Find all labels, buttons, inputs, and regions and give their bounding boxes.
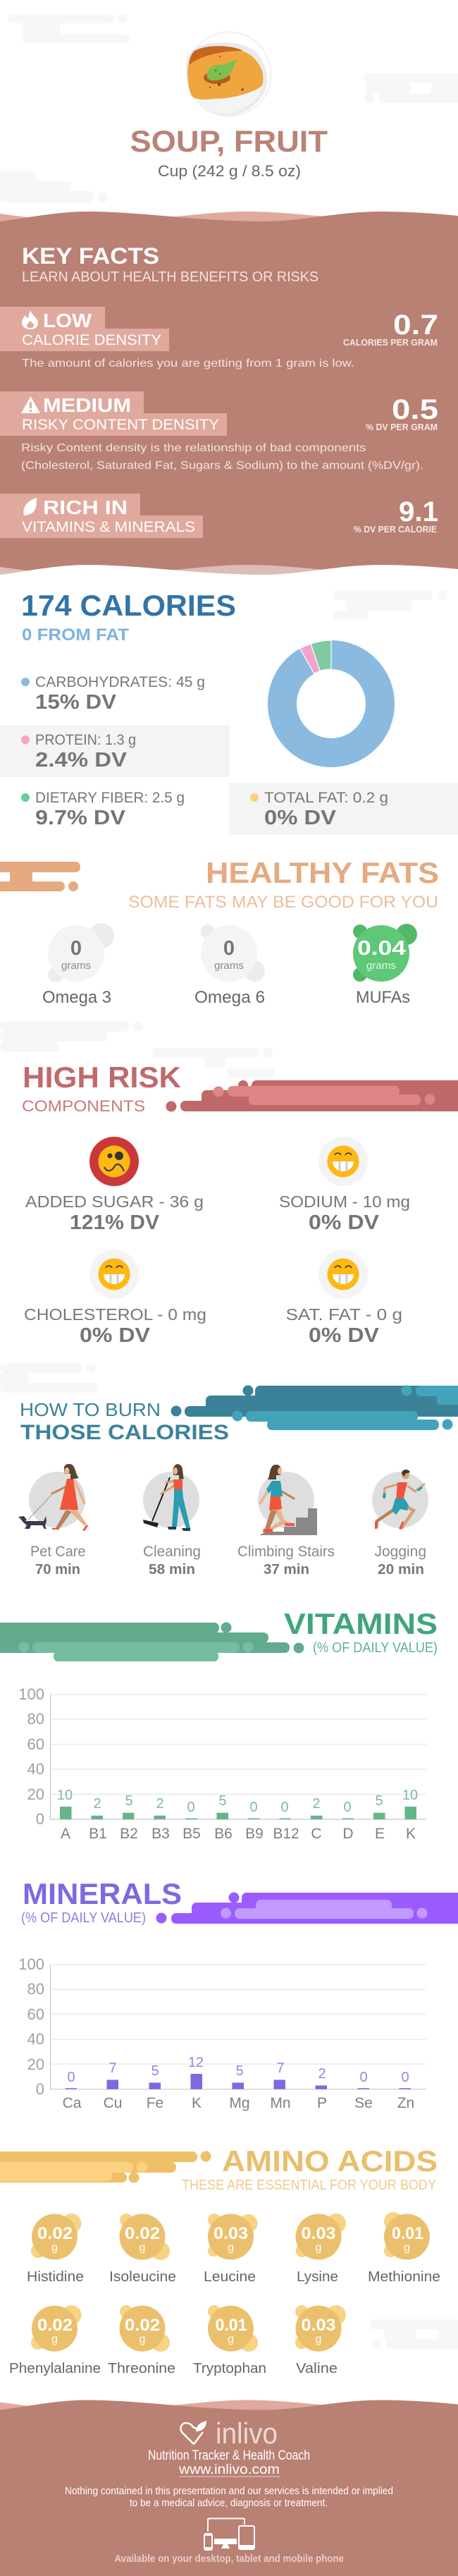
illustration: woman on stairs <box>258 1465 317 1535</box>
icon: grin face <box>318 1137 368 1186</box>
unit: % dv per calorie: % DV PER CALORIE <box>354 525 437 535</box>
bar chart: vitamins: B5 <box>182 1826 201 1842</box>
bar chart: vitamins: B1 <box>89 1826 107 1842</box>
sodium <box>279 1137 410 1234</box>
omega 3: 0 <box>70 937 82 960</box>
rating: medium: MEDIUM <box>43 394 131 416</box>
activity: pet care: 70 min <box>35 1562 80 1577</box>
bar chart: minerals: 100 <box>18 1955 44 1973</box>
amino: phenylalanine <box>9 2305 101 2376</box>
activity: cleaning <box>143 1464 201 1577</box>
banner: purple shapes <box>156 1893 458 1924</box>
heading line 1: HOW TO BURN <box>20 1399 161 1420</box>
description: The amount of calories you are getting from 1 gram is low. <box>22 358 354 370</box>
bar chart: vitamins: B9 <box>245 1826 264 1842</box>
amino: histidine <box>27 2214 84 2285</box>
amino: valine <box>295 2305 346 2376</box>
bar chart: minerals: 2 <box>318 2066 326 2082</box>
panel: key facts <box>0 212 458 586</box>
activity: climbing stairs: 37 min <box>264 1562 309 1577</box>
activity: pet care <box>18 1464 88 1577</box>
amino: valine: Valine <box>296 2361 338 2376</box>
bar chart: minerals: 20 <box>27 2056 44 2073</box>
description line 2: (Cholesterol, Saturated Fat, Sugars & Sodium) to the amount (%DV/gr). <box>21 460 423 472</box>
mufas: grams <box>366 960 396 972</box>
legend: protein: 2.4% DV <box>35 749 128 771</box>
bar chart: minerals <box>18 1955 426 2111</box>
activity: pet care: Pet Care <box>30 1544 86 1560</box>
bar chart: vitamins: 20 <box>27 1786 44 1803</box>
bar chart: minerals: 80 <box>27 1980 44 1998</box>
amino: histidine: g <box>51 2242 58 2254</box>
omega 6: 0 <box>223 937 235 960</box>
heading: AMINO ACIDS <box>222 2144 438 2178</box>
heading: MINERALS <box>23 1877 182 1910</box>
bar chart: minerals: 0 <box>359 2070 368 2085</box>
heading: key facts: KEY FACTS <box>22 243 159 269</box>
amino: leucine: Leucine <box>204 2269 256 2285</box>
sodium: 0% DV <box>309 1211 380 1234</box>
mufas: MUFAs <box>356 988 410 1007</box>
heading: VITAMINS <box>284 1607 438 1640</box>
bar chart: minerals: Mg <box>229 2095 250 2111</box>
icon: warning triangle <box>21 396 40 413</box>
bar chart: minerals: Ca <box>63 2095 82 2111</box>
cholesterol: 0% DV <box>80 1324 151 1347</box>
bar chart: vitamins: 5 <box>218 1793 227 1809</box>
subheading: LEARN ABOUT HEALTH BENEFITS OR RISKS <box>22 269 318 285</box>
banner: orange shapes <box>0 862 80 891</box>
omega 6: Omega 6 <box>194 988 265 1007</box>
bar chart: vitamins: 80 <box>27 1710 44 1728</box>
subheading: THESE ARE ESSENTIAL FOR YOUR BODY <box>182 2178 436 2193</box>
panel: vitamins <box>0 1607 438 1842</box>
bar chart: minerals: Fe <box>147 2095 163 2111</box>
bar chart: vitamins: K <box>406 1826 416 1842</box>
amino: lysine: Lysine <box>297 2269 338 2285</box>
legend: protein: PROTEIN: 1.3 g <box>35 732 136 748</box>
bar chart: vitamins: A <box>61 1826 70 1842</box>
bar chart: minerals: 60 <box>27 2006 44 2023</box>
amino: histidine: 0.02 <box>37 2224 73 2243</box>
website: www.inlivo.com <box>178 2462 280 2477</box>
legend: protein <box>21 732 136 771</box>
subheading: COMPONENTS <box>22 1097 145 1115</box>
bar chart: vitamins: B6 <box>214 1826 233 1842</box>
saturated fat <box>286 1250 402 1347</box>
bar chart: minerals: 0 <box>67 2070 75 2085</box>
amino: methionine: Methionine <box>368 2269 440 2285</box>
amino: lysine: 0.03 <box>302 2224 335 2243</box>
saturated fat: SAT. FAT - 0 g <box>286 1305 402 1324</box>
bar chart: minerals: 7 <box>276 2061 285 2076</box>
amino: methionine <box>368 2212 440 2285</box>
value: 9.1: 9.1 <box>399 496 438 527</box>
amino: phenylalanine: Phenylalanine <box>9 2361 101 2376</box>
icon: grin face <box>89 1250 139 1299</box>
bar chart: minerals: 5 <box>151 2063 159 2079</box>
icon: leaf <box>23 498 37 515</box>
added sugar: 121% DV <box>70 1211 160 1234</box>
subheading: SOME FATS MAY BE GOOD FOR YOU <box>128 893 438 912</box>
legend: dietary fiber: 9.7% DV <box>35 807 126 829</box>
bar chart: vitamins: 40 <box>27 1760 44 1778</box>
omega 6: grams <box>214 960 244 972</box>
bar chart: vitamins: B2 <box>120 1826 138 1842</box>
bar chart: minerals: K <box>192 2095 202 2111</box>
omega 3: grams <box>61 960 91 972</box>
amino: valine: 0.03 <box>302 2316 335 2335</box>
amino: leucine: g <box>228 2242 234 2254</box>
bar chart: vitamins: 2 <box>312 1796 321 1812</box>
amino: threonine: Threonine <box>108 2361 175 2376</box>
amino: threonine: g <box>140 2333 145 2345</box>
amino: lysine: g <box>316 2242 321 2254</box>
omega 3 <box>42 923 114 1007</box>
amino: phenylalanine: g <box>51 2333 58 2345</box>
amino: methionine: 0.01 <box>392 2224 423 2243</box>
bar chart: minerals: P <box>317 2095 327 2111</box>
availability note: Available on your desktop, tablet and mobile phone <box>114 2553 344 2565</box>
bar chart: vitamins: 100 <box>18 1685 44 1703</box>
panel: amino acids <box>0 2144 440 2376</box>
serving size: Cup (242 g / 8.5 oz) <box>158 162 301 180</box>
amino: isoleucine: 0.02 <box>125 2224 160 2243</box>
panel: footer <box>0 2400 458 2576</box>
risky density label boxes <box>0 391 227 436</box>
bar chart: vitamins: 10 <box>402 1788 418 1803</box>
description line 1: Risky Content density is the relationship of bad components <box>21 442 366 454</box>
bar chart: vitamins: D <box>342 1826 354 1842</box>
logo: heart with leaf <box>181 2421 206 2444</box>
banner: green shapes <box>0 1622 304 1661</box>
legend: carbohydrates <box>21 674 205 714</box>
legend: total fat: TOTAL FAT: 0.2 g <box>264 790 388 806</box>
legend: carbohydrates: CARBOHYDRATES: 45 g <box>35 674 205 690</box>
subheading: (% OF DAILY VALUE) <box>21 1910 146 1926</box>
label: vitamins and minerals: VITAMINS & MINERALS <box>22 519 195 535</box>
disclaimer line 2: to be a medical advice, diagnosis or treatment. <box>130 2497 328 2509</box>
added sugar <box>25 1137 204 1234</box>
donut chart <box>282 640 380 753</box>
amino: methionine: g <box>404 2242 410 2254</box>
bar chart: vitamins: 10 <box>57 1788 73 1803</box>
amino: phenylalanine: 0.02 <box>37 2316 73 2335</box>
activity: climbing stairs <box>237 1465 335 1577</box>
legend: carbohydrates: 15% DV <box>35 691 117 714</box>
mufas <box>353 924 417 1007</box>
cholesterol <box>24 1250 206 1347</box>
title: SOUP, FRUIT <box>130 125 328 159</box>
bar chart: vitamins: 2 <box>156 1796 164 1812</box>
tagline: Nutrition Tracker & Health Coach <box>148 2448 310 2463</box>
bar chart: minerals: Cu <box>104 2095 122 2111</box>
sodium: SODIUM - 10 mg <box>279 1192 410 1211</box>
legend: dietary fiber <box>21 790 185 829</box>
unit: % dv per gram: % DV PER GRAM <box>366 422 438 432</box>
bar chart: vitamins <box>18 1685 426 1842</box>
amino: leucine: 0.03 <box>213 2224 248 2243</box>
added sugar: ADDED SUGAR - 36 g <box>25 1192 204 1211</box>
heading: calories: 174 CALORIES <box>21 589 236 622</box>
cholesterol: CHOLESTEROL - 0 mg <box>24 1305 206 1324</box>
activity: jogging: Jogging <box>375 1544 426 1560</box>
rating: low: LOW <box>43 310 92 331</box>
icon: grin face <box>318 1250 368 1299</box>
heading line 2: THOSE CALORIES <box>20 1421 229 1444</box>
panel: how to burn those calories <box>18 1385 458 1577</box>
amino: isoleucine: g <box>140 2242 145 2254</box>
amino: threonine <box>108 2305 175 2376</box>
icon: flame <box>22 310 38 329</box>
amino: leucine <box>204 2214 258 2285</box>
illustration: person sweeping <box>143 1464 199 1531</box>
bar chart: minerals: 0 <box>36 2080 44 2098</box>
activity: cleaning: 58 min <box>149 1562 195 1577</box>
bar chart: vitamins: 0 <box>249 1800 258 1815</box>
amino: tryptophan: g <box>228 2333 234 2345</box>
illustration: runner <box>372 1470 428 1530</box>
amino: lysine <box>296 2214 346 2285</box>
calorie density label boxes <box>0 307 169 351</box>
icon: soup bowl <box>186 31 272 117</box>
panel: high risk components <box>22 1061 458 1347</box>
rating: rich in: RICH IN <box>43 496 128 518</box>
activity: jogging <box>372 1470 428 1577</box>
amino: threonine: 0.02 <box>125 2316 160 2335</box>
logo wordmark: inlivo <box>216 2417 278 2450</box>
label: risky content density: RISKY CONTENT DENSITY <box>22 417 219 433</box>
banner: teal shapes <box>171 1385 458 1430</box>
legend: total fat: 0% DV <box>264 807 337 829</box>
bar chart: vitamins: 5 <box>375 1793 383 1809</box>
subheading: (% OF DAILY VALUE) <box>313 1640 438 1656</box>
label: calorie density: CALORIE DENSITY <box>22 332 161 348</box>
banner: yellow shapes <box>0 2151 211 2183</box>
rich in label boxes <box>0 494 203 538</box>
row highlight: total fat <box>229 783 458 835</box>
activity: jogging: 20 min <box>378 1562 424 1577</box>
bar chart: minerals: 12 <box>188 2055 204 2070</box>
bar chart: vitamins: 2 <box>93 1796 101 1812</box>
bar chart: minerals: Se <box>354 2095 373 2111</box>
amino: tryptophan: 0.01 <box>216 2316 247 2335</box>
omega 6 <box>194 924 265 1007</box>
saturated fat: 0% DV <box>309 1324 380 1347</box>
bar chart: vitamins: C <box>311 1826 322 1842</box>
panel: healthy fats <box>0 856 439 1007</box>
amino: isoleucine: Isoleucine <box>109 2269 176 2285</box>
icon: devices <box>204 2519 254 2550</box>
banner: red shapes <box>166 1080 458 1111</box>
activity: climbing stairs: Climbing Stairs <box>237 1544 335 1560</box>
panel: calories <box>0 589 458 835</box>
bar chart: minerals: 40 <box>27 2030 44 2048</box>
unit: calories per gram: CALORIES PER GRAM <box>343 338 438 348</box>
row highlight: protein <box>0 725 230 777</box>
disclaimer line 1: Nothing contained in this presentation and our services is intended or implied <box>65 2485 393 2497</box>
bar chart: vitamins: 0 <box>343 1800 352 1815</box>
amino: tryptophan: Tryptophan <box>193 2361 266 2376</box>
bar chart: minerals: 0 <box>401 2070 409 2085</box>
icon: worried face <box>89 1137 139 1186</box>
bar chart: vitamins: B3 <box>151 1826 170 1842</box>
legend: total fat <box>250 790 388 829</box>
omega 3: Omega 3 <box>42 988 111 1007</box>
mufas: 0.04 <box>357 937 406 960</box>
amino: tryptophan <box>193 2305 266 2376</box>
subheading: from fat: 0 FROM FAT <box>22 625 129 645</box>
heading: HIGH RISK <box>23 1061 181 1094</box>
bar chart: vitamins: 60 <box>27 1735 44 1753</box>
heading: HEALTHY FATS <box>206 856 439 889</box>
bar chart: vitamins: 0 <box>280 1800 289 1815</box>
bar chart: minerals: Zn <box>397 2095 414 2111</box>
illustration: woman walking dog <box>18 1464 88 1531</box>
value: 0.7: 0.7 <box>393 310 438 341</box>
activity: cleaning: Cleaning <box>143 1544 201 1560</box>
value: 0.5: 0.5 <box>392 394 438 425</box>
bar chart: minerals: 5 <box>235 2063 244 2079</box>
bar chart: vitamins: 0 <box>36 1810 44 1828</box>
amino: isoleucine <box>109 2214 176 2285</box>
bar chart: minerals: 7 <box>109 2061 117 2076</box>
bar chart: vitamins: 5 <box>125 1793 133 1809</box>
bar chart: vitamins: B12 <box>273 1826 299 1842</box>
panel: minerals <box>18 1877 458 2111</box>
amino: histidine: Histidine <box>27 2269 84 2285</box>
bar chart: vitamins: E <box>375 1826 385 1842</box>
legend: dietary fiber: DIETARY FIBER: 2.5 g <box>35 790 185 806</box>
bar chart: minerals: Mn <box>270 2095 291 2111</box>
amino: valine: g <box>316 2333 321 2345</box>
bar chart: vitamins: 0 <box>187 1800 195 1815</box>
